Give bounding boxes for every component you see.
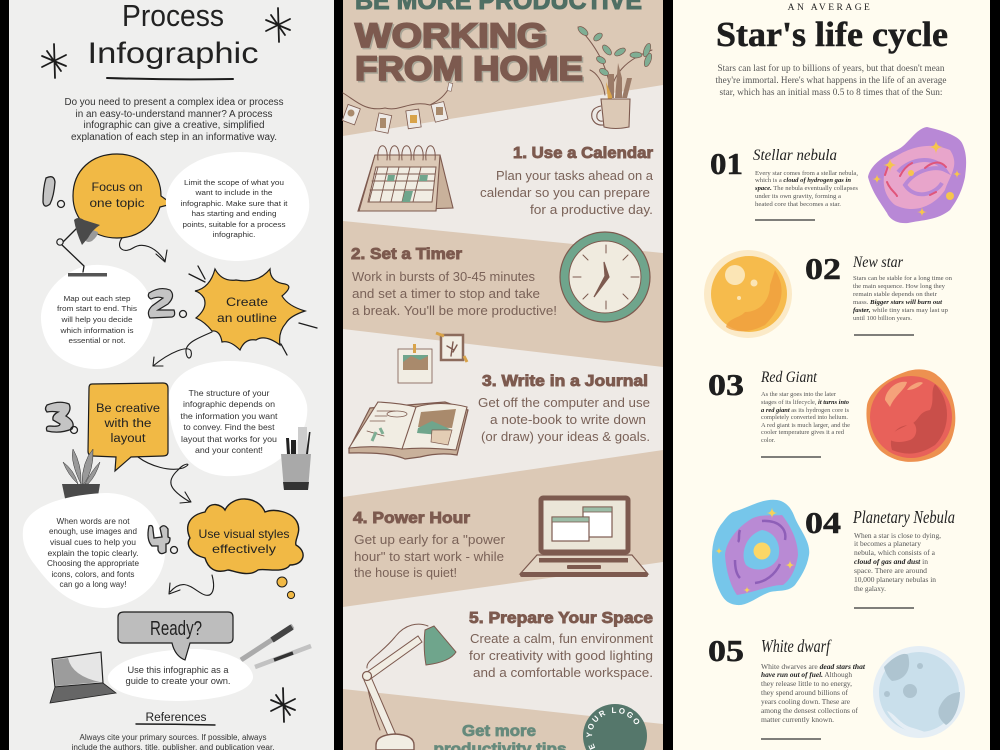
- step 2 heading and text: 2. Set a Timer: [351, 246, 462, 263]
- step 05: White dwarves are dead stars that: [761, 662, 866, 671]
- title: working from home: WORKING: [355, 17, 547, 55]
- footer call to action: Get more: [462, 723, 536, 740]
- text blob: step 3: [168, 361, 307, 476]
- step 3 number: [46, 402, 78, 434]
- title: star's life cycle: Star's life cycle: [716, 15, 948, 54]
- step 04: When a star is close to dying,: [854, 531, 941, 540]
- text blob: step 1: infographic. Make sure that it: [180, 199, 288, 208]
- step 4 thought cloud: Use visual styles: [198, 527, 290, 541]
- step 5 heading and text: for creativity with good lighting: [469, 649, 653, 663]
- step 2 heading and text: [351, 246, 557, 318]
- step 03: Red Giant: [760, 369, 817, 386]
- text blob: step 4: visual cues to help you: [50, 538, 136, 547]
- step 01: Stellar nebula: [753, 147, 837, 164]
- step 05: they release little to no energy,: [761, 679, 852, 688]
- step 04: [805, 505, 955, 608]
- step 04: it becomes a planetary: [854, 539, 921, 548]
- title: working from home: WORKING: [356, 18, 548, 56]
- step 2 starburst: Create: [226, 295, 268, 309]
- step 2 number: [148, 289, 186, 318]
- step 3 speech box: Be creative: [96, 403, 160, 415]
- icon: pens: [241, 626, 311, 667]
- text blob: step 1: Limit the scope of what you: [184, 178, 284, 187]
- text blob: step 1: points, suitable for a process: [182, 220, 286, 229]
- text blob: step 2: [41, 265, 153, 369]
- icon: laptop: [50, 652, 116, 703]
- text blob: ready: [108, 649, 253, 701]
- text blob: step 3: The structure of your: [188, 388, 270, 398]
- text blob: step 3: infographic depends on: [183, 399, 275, 409]
- step 5 heading and text: 5. Prepare Your Space: [469, 610, 653, 627]
- text blob: step 3: to convey. Find the best: [184, 422, 275, 432]
- text blob: step 1: has starting and ending: [192, 209, 276, 218]
- ready speech box: Ready?: [150, 618, 202, 640]
- step 03: cooler temperature gives it a red: [761, 429, 845, 436]
- step 1 bubble: one topic: [90, 196, 144, 210]
- step 2 starburst: [195, 269, 305, 350]
- step 02: remain stable depends on their: [853, 291, 938, 298]
- intro text: explanation of each step in an informative way.: [71, 132, 277, 143]
- text blob: step 1: [166, 152, 309, 261]
- step 3 speech box: layout: [110, 433, 146, 445]
- thought dots: [277, 577, 295, 599]
- step 04: space. There are around: [854, 566, 927, 575]
- step 1 heading and text: Plan your tasks ahead on a: [496, 169, 653, 183]
- step 3 heading and text: 3. Write in a Journal: [482, 373, 648, 390]
- step 4 number: [148, 526, 178, 554]
- step 1 heading and text: for a productive day.: [530, 203, 653, 217]
- icon: sketch star left: [42, 44, 66, 78]
- intro text: Do you need to present a complex idea or process: [64, 97, 284, 108]
- step 05: White dwarf: [761, 636, 832, 656]
- step 4 heading and text: Get up early for a "power: [354, 533, 505, 547]
- references heading: References: [146, 712, 207, 724]
- title: working from home: FROM HOME: [356, 52, 584, 90]
- text blob: step 3: and your content!: [195, 445, 263, 455]
- icon: desk lamp: [57, 218, 107, 276]
- text blob: step 3: layout that works for you: [181, 434, 277, 444]
- text blob: ready: guide to create your own.: [126, 675, 230, 686]
- intro text: Stars can last for up to billions of years, but that doesn't mean: [718, 63, 945, 74]
- text blob: step 4: can go a long way!: [60, 580, 126, 589]
- step 03: completely converted into helium.: [761, 414, 848, 421]
- step 3 heading and text: (or draw) your ideas & goals.: [481, 430, 650, 444]
- icon: string of photos: [342, 83, 453, 133]
- intro text: [716, 63, 946, 98]
- illustration: white dwarf: [873, 646, 965, 738]
- title: process infographic: [88, 0, 258, 79]
- text blob: step 4: explain the topic clearly.: [48, 549, 138, 558]
- step 04: 04: [805, 505, 841, 540]
- ready speech box: [118, 612, 233, 660]
- step 03: a red giant as its hydrogen core is: [761, 407, 850, 414]
- step 4 heading and text: the house is quiet!: [354, 566, 457, 580]
- icon: potted plant: [62, 449, 100, 508]
- step 3 speech box: [88, 383, 168, 471]
- step 3 heading and text: Get off the computer and use: [478, 396, 650, 410]
- step 02: Stars can be stable for a long time on: [853, 275, 953, 282]
- step 03: 03: [708, 367, 744, 402]
- text blob: step 1: want to include in the: [194, 188, 272, 197]
- step 05: [708, 633, 866, 739]
- step 04: 10,000 planetary nebulas in: [854, 575, 936, 584]
- burst rays: [189, 266, 317, 355]
- step 3 heading and text: [478, 373, 650, 444]
- step 02: [805, 251, 953, 335]
- illustration: planetary nebula: [712, 500, 809, 605]
- illustration: new star: [704, 250, 792, 338]
- icon: desk lamp: [362, 624, 456, 750]
- illustration: stellar nebula: [868, 127, 966, 223]
- title: process infographic: Infographic: [88, 37, 258, 70]
- step 02: faster, while tiny stars may last up: [853, 307, 948, 314]
- step 3 speech box: with the: [103, 418, 152, 430]
- step 4 heading and text: 4. Power Hour: [353, 510, 470, 527]
- arrow: step 2 to 3: [153, 332, 212, 366]
- step 2 heading and text: and set a timer to stop and take: [352, 287, 540, 301]
- text blob: step 4: Choosing the appropriate: [47, 559, 140, 568]
- step 05: matter currently known.: [761, 715, 834, 724]
- step 1 heading and text: calendar so you can prepare: [480, 186, 650, 200]
- step 1 bubble: Focus on: [92, 180, 142, 194]
- step 02: until 100 billion years.: [853, 315, 912, 322]
- step 01: under its own gravity, forming a: [755, 193, 841, 200]
- step 2 heading and text: a break. You'll be more productive!: [352, 304, 557, 318]
- panel: working from home: [342, 0, 663, 750]
- step 02: the main sequence. How long they: [853, 283, 946, 290]
- title: an average: AN AVERAGE: [788, 3, 872, 13]
- icon: pencil cup: [281, 427, 311, 490]
- text blob: step 1: infographic.: [212, 230, 256, 239]
- step 1 bubble: [73, 154, 172, 238]
- step 05: among the densest collections of: [761, 706, 859, 715]
- icon: open journal: [349, 402, 468, 459]
- icon: sketch star top right: [266, 8, 290, 42]
- text blob: step 2: which information is: [59, 326, 134, 335]
- step 5 heading and text: Create a calm, fun environment: [470, 632, 654, 646]
- step 05: they spend around billions of: [761, 688, 849, 697]
- step 03: color.: [761, 437, 775, 444]
- arrow: step 3 to 4: [138, 457, 191, 503]
- intro text: infographic can give a creative, simplified: [84, 120, 264, 131]
- step 05: years cooling down. These are: [761, 697, 850, 706]
- text blob: step 4: When words are not: [56, 517, 130, 526]
- step 01: which is a cloud of hydrogen gas in: [755, 177, 852, 184]
- intro text: they're immortal. Here's what happens in the life of an average: [716, 75, 946, 86]
- step 5 heading and text: and a comfortable workspace.: [473, 666, 653, 680]
- step 01: Every star comes from a stellar nebula,: [755, 170, 858, 177]
- step 01: [710, 146, 859, 220]
- step 1 number: [43, 177, 64, 208]
- step 03: A red giant is much larger, and the: [761, 422, 850, 429]
- arrow: step 1 to 2: [120, 238, 167, 262]
- text blob: step 4: enough, use images and: [49, 527, 137, 536]
- step 01: heated core that becomes a star.: [755, 201, 841, 208]
- icon: laptop with windows: [520, 498, 648, 577]
- step 04: cloud of gas and dust in: [854, 557, 928, 566]
- text blob: step 4: icons, colors, and fonts: [52, 570, 134, 579]
- step 02: New star: [852, 254, 904, 271]
- icon: calendar: [358, 146, 453, 211]
- step 5 heading and text: [469, 610, 654, 680]
- step 04: nebula, which consists of a: [854, 548, 936, 557]
- step 4 thought cloud: effectively: [212, 542, 276, 556]
- text blob: step 2: Map out each step: [64, 294, 130, 303]
- step 2 starburst: an outline: [217, 311, 277, 325]
- arrow: step 4 down: [169, 575, 214, 595]
- icon: mug with plant: [576, 25, 653, 129]
- text blob: ready: Use this infographic as a: [128, 664, 229, 675]
- step 4 thought cloud: [188, 499, 303, 574]
- text blob: step 2: from start to end. This: [57, 304, 137, 313]
- step 4 heading and text: [353, 510, 505, 580]
- step 05: 05: [708, 633, 744, 668]
- step 2 heading and text: Work in bursts of 30-45 minutes: [352, 270, 535, 284]
- intro text: in an easy-to-understand manner? A process: [76, 109, 273, 120]
- intro text: [64, 97, 284, 143]
- step 04: Planetary Nebula: [852, 507, 955, 527]
- references text: Always cite your primary sources. If possible, always: [80, 733, 266, 742]
- step 03: As the star goes into the later: [761, 391, 837, 398]
- step 02: mass. Bigger stars will burn out: [853, 299, 942, 306]
- step 1 heading and text: [480, 145, 653, 217]
- text blob: step 2: essential or not.: [68, 336, 126, 345]
- icon: sketch star bottom: [271, 688, 295, 722]
- intro text: star, which has an initial mass 0.5 to 8 times that of the Sun:: [720, 87, 942, 98]
- title: working from home: FROM HOME: [355, 50, 583, 88]
- title: working from home: [355, 17, 584, 90]
- step 02: 02: [805, 251, 841, 286]
- references heading: [136, 712, 215, 725]
- panel: process infographic: [9, 0, 334, 750]
- step 1 heading and text: 1. Use a Calendar: [513, 145, 653, 162]
- text blob: step 2: will help you decide: [60, 315, 132, 324]
- references text: [72, 733, 274, 750]
- text blob: step 3: the information you want: [180, 411, 278, 421]
- step 4 heading and text: hour" to start work - while: [354, 550, 504, 564]
- step 01: space. The nebula eventually collapses: [754, 185, 859, 192]
- text blob: step 4: [23, 493, 165, 608]
- step 05: have run out of fuel. Although: [761, 670, 852, 679]
- footer call to action: [434, 723, 567, 750]
- icon: clock: [560, 232, 650, 322]
- step 3 heading and text: a note-book to write down: [490, 413, 646, 427]
- step 04: the galaxy.: [854, 584, 886, 593]
- step 03: stages of its lifecycle, it turns into: [761, 399, 849, 406]
- step 03: [708, 367, 850, 457]
- panel: star life cycle: [673, 0, 990, 750]
- step 01: 01: [710, 146, 743, 181]
- illustration: red giant: [866, 369, 955, 462]
- icon: pinned pictures: [398, 333, 467, 383]
